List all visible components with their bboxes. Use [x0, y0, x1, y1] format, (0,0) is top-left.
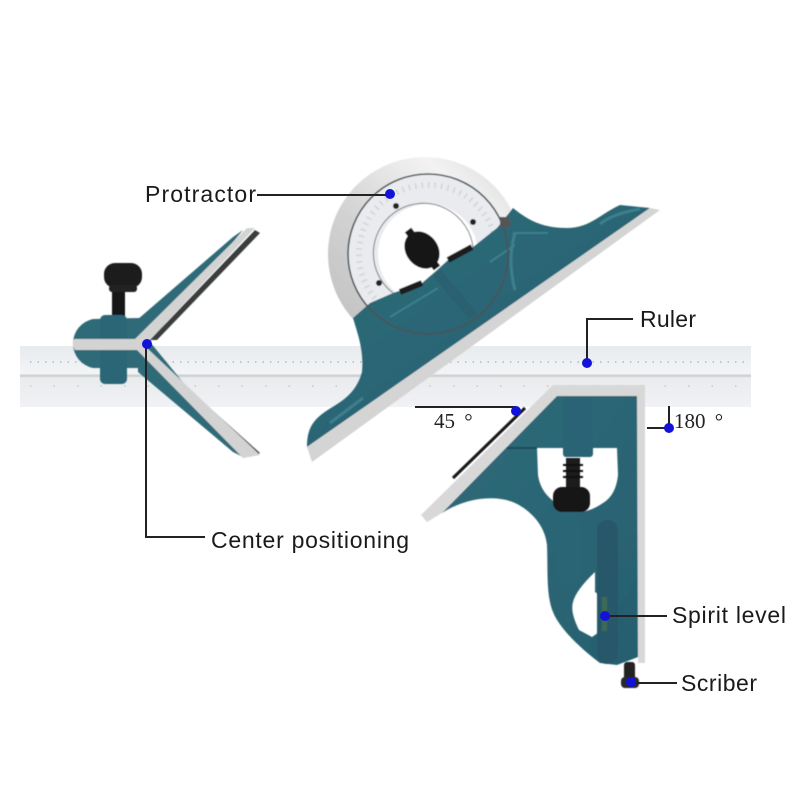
- callout: 45 degrees: [415, 406, 521, 433]
- scriber: [621, 662, 639, 688]
- center head: [73, 228, 260, 458]
- center head steel blades: [73, 228, 260, 458]
- center head body: [73, 318, 140, 368]
- protractor head: [307, 157, 660, 462]
- callout: 180 degrees: 180 °: [674, 409, 723, 433]
- callout: scriber: Scriber: [681, 670, 757, 696]
- protractor disc: [328, 157, 522, 351]
- callout: 45 degrees: 45 °: [434, 409, 473, 433]
- square head oval recess: [556, 517, 582, 587]
- square head shoulder line: [507, 447, 537, 449]
- callout: protractor: [145, 181, 395, 207]
- ruler: [20, 346, 751, 407]
- callout: 180 degrees: [647, 406, 723, 433]
- protractor pivot screw: [500, 217, 510, 227]
- callout: center positioning: [142, 339, 409, 553]
- icon: protractor knob: [397, 224, 447, 276]
- icon: center head knob: [104, 263, 142, 316]
- center head teal backing: [137, 230, 245, 458]
- callout: ruler: Ruler: [640, 306, 696, 332]
- protractor black bars: [400, 247, 472, 292]
- protractor scale ring outline: [348, 174, 508, 334]
- center head rib: [100, 315, 127, 384]
- protractor cast body: [307, 205, 650, 447]
- callout: center positioning: Center positioning: [211, 527, 409, 553]
- callout: scriber: [626, 670, 757, 696]
- center head dark edges: [150, 230, 260, 455]
- protractor hole outline: [373, 203, 473, 293]
- icon: square head knob and spring: [553, 458, 590, 512]
- square head: [421, 385, 645, 688]
- square head steel frame: [421, 385, 645, 663]
- protractor body ribs: [330, 209, 640, 423]
- square head dark edge: [453, 408, 525, 478]
- square head cast body: [442, 396, 638, 665]
- square head side slot: [597, 520, 618, 664]
- protractor steel base: [307, 208, 660, 462]
- callout: protractor: Protractor: [145, 181, 256, 207]
- callout: ruler: [582, 306, 696, 368]
- square head top rib: [563, 397, 593, 457]
- callout: spirit level: Spirit level: [672, 602, 786, 628]
- callout: spirit level: [600, 602, 786, 628]
- spirit level window: [602, 597, 607, 631]
